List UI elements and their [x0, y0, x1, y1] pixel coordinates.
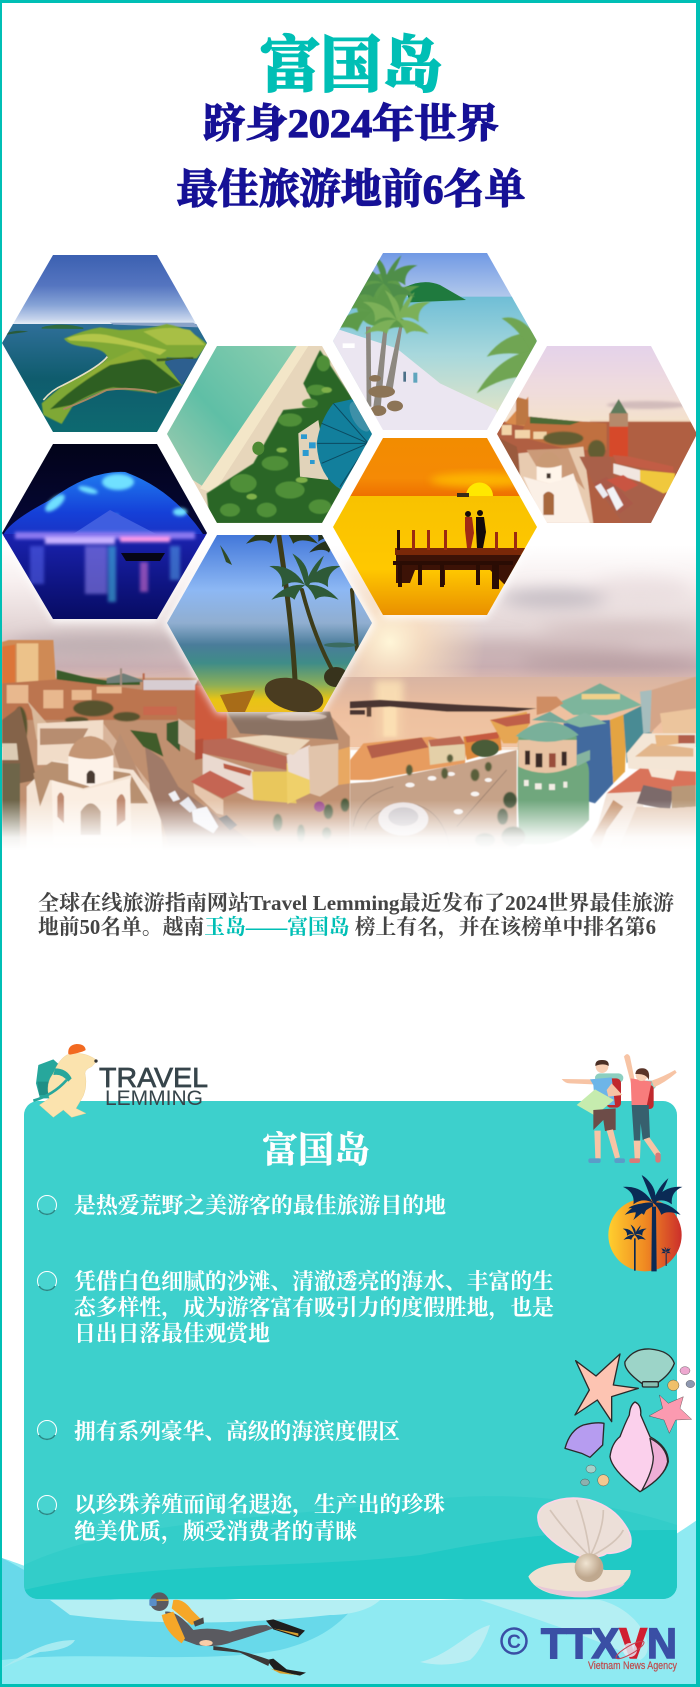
copyright mark: C	[507, 1632, 521, 1653]
bullet marker 2	[38, 1272, 56, 1290]
man	[595, 1073, 623, 1083]
subtitle line 1: 跻身2024年世界	[203, 101, 499, 146]
subtitle line 2: 最佳旅游地前6名单	[176, 166, 526, 212]
small shells	[680, 1367, 690, 1375]
bullet text 1: 是热爱荒野之美游客的最佳旅游目的地	[74, 1193, 446, 1218]
pebbles	[586, 1465, 596, 1473]
tank	[172, 1600, 203, 1625]
illustration: palm trees and sunset	[608, 1175, 682, 1271]
illustration: scuba diver	[149, 1592, 306, 1676]
green round tower	[518, 730, 589, 845]
bullet text 4	[74, 1492, 445, 1545]
bullet marker 3	[38, 1420, 56, 1440]
panel: Phu Quoc highlights	[24, 1101, 677, 1600]
conch	[610, 1402, 668, 1492]
blue building	[563, 720, 613, 803]
right half of the town	[350, 677, 696, 853]
panel heading: 富国岛	[262, 1129, 370, 1170]
hexagon photo: aerial beach with pool	[167, 346, 375, 524]
red tower and main building	[195, 685, 227, 742]
tagline: Vietnam News Agency	[588, 1660, 677, 1672]
bullet text 4: 绝美优质，颇受消费者的青睐	[74, 1519, 357, 1545]
bullet text 3: 拥有系列豪华、高级的海滨度假区	[74, 1419, 400, 1444]
white domed building	[28, 702, 46, 740]
intro text	[38, 891, 674, 940]
title: 富国岛: 富国岛	[259, 32, 443, 100]
woman	[643, 1081, 656, 1089]
background wave: bottom sea	[2, 1520, 697, 1685]
agency logo: TTXVN	[502, 1620, 677, 1672]
left half of the town	[2, 640, 350, 860]
scallop	[625, 1349, 674, 1383]
bullet list	[38, 1193, 554, 1545]
road	[145, 748, 234, 830]
starfish	[575, 1354, 638, 1422]
hexagon photo: town and red tower	[493, 345, 700, 525]
intro text: 地前50名单。越南玉岛——富国岛 榜上有名，并在该榜单中排名第6	[38, 915, 656, 940]
hexagon photo: night fountain show	[0, 440, 210, 624]
white roofed buildings right	[650, 677, 696, 733]
wordmark: TTXVN	[541, 1620, 677, 1668]
globe swoosh	[614, 1639, 646, 1661]
bullet text 2: 凭借白色细腻的沙滩、清澈透亮的海水、丰富的生	[74, 1269, 554, 1294]
logo text: TRAVEL: TRAVEL	[99, 1062, 208, 1093]
bullet text 2: 日出日落最佳观赏地	[74, 1321, 270, 1346]
bullet text 2: 态多样性，成为游客富有吸引力的度假胜地，也是	[74, 1295, 554, 1321]
copyright mark	[502, 1628, 526, 1654]
pink starfish	[649, 1395, 692, 1433]
hexagon photo: island aerial	[0, 253, 210, 433]
hexagon photo: palm beach	[324, 252, 540, 432]
bullet text 2	[74, 1269, 554, 1346]
intro text: 全球在线旅游指南网站Travel Lemming最近发布了2024世界最佳旅游	[38, 891, 674, 915]
decorative white halo	[0, 438, 540, 714]
flippers	[266, 1619, 305, 1637]
body	[213, 1646, 270, 1666]
illustration: two travellers	[562, 1054, 677, 1163]
photo: panorama of town at sunset	[2, 559, 696, 844]
bullet marker 1	[38, 1196, 56, 1214]
purple shell	[565, 1423, 604, 1457]
bullet text 4: 以珍珠养殖而闻名遐迩，生产出的珍珠	[74, 1492, 445, 1518]
icon: lemming with backpack	[33, 1044, 98, 1117]
bullet marker 4	[38, 1496, 56, 1514]
logo: Travel Lemming	[33, 1044, 208, 1117]
illustration: starfish and shells	[565, 1349, 695, 1492]
logo text: LEMMING: LEMMING	[105, 1087, 203, 1110]
illustration: pearl in shell	[528, 1498, 631, 1597]
hexagon photo: leaning palms	[167, 535, 372, 712]
hexagon photo: sunset pier	[330, 435, 540, 618]
